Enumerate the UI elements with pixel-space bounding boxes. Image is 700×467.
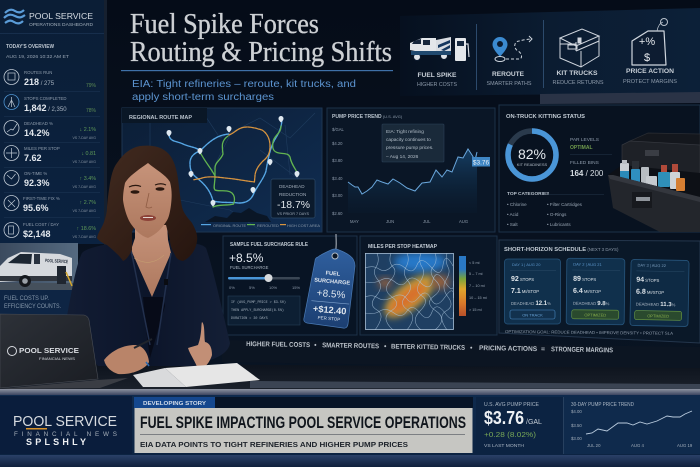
logo: pool service financial news: SPLSHLY bbox=[26, 437, 86, 447]
metric: first-time fix: 95.6% bbox=[23, 203, 49, 213]
schedule card: day 1: DAY 1 | AUG 20 bbox=[512, 262, 541, 267]
ticker strip: HIGHER FUEL COSTS bbox=[246, 341, 311, 349]
schedule card: day 2 bbox=[566, 258, 625, 325]
callout: EIA note: EIA: Tight refining bbox=[386, 129, 424, 135]
icon group: reroute bbox=[492, 36, 532, 62]
label: reroute: SMARTER PATHS bbox=[486, 81, 532, 87]
panel: fuel costs caption: FUEL COSTS UP. bbox=[4, 296, 49, 302]
logo bbox=[4, 10, 25, 23]
label: kit trucks: KIT TRUCKS bbox=[556, 70, 598, 77]
paper notes bbox=[133, 363, 260, 387]
stats: par levels and filled bins bbox=[570, 137, 612, 178]
metric: on-time: ON-TIME % bbox=[24, 171, 47, 176]
subtitle: apply short-term surcharges bbox=[132, 92, 274, 103]
laptop logo: POOL SERVICE bbox=[19, 346, 79, 355]
header strip with icons bbox=[400, 8, 700, 104]
metric: on-time: VS 7-DAY AVG bbox=[72, 185, 96, 189]
metric: routes run bbox=[4, 70, 97, 89]
silver divider bbox=[0, 389, 700, 395]
heading: ON-TRUCK KITTING STATUS bbox=[506, 114, 585, 120]
heading: regional route map bbox=[122, 108, 207, 123]
metric: deadhead bbox=[4, 120, 96, 140]
metric: miles per stop: ↓ 0.81 bbox=[81, 151, 96, 157]
icon group: price tag: +% bbox=[639, 36, 655, 48]
x axis labels bbox=[350, 219, 468, 224]
y axis labels: $3.40 bbox=[332, 176, 343, 181]
rule code box: THEN APPLY_SURCHARGE(8.5%) bbox=[231, 308, 284, 313]
panel: pump price trend chart bbox=[327, 108, 495, 232]
stats: par levels and filled bins: FILLED BINS bbox=[570, 160, 599, 166]
label: fuel spike: HIGHER COSTS bbox=[417, 82, 458, 88]
schedule card: day 1 bbox=[504, 259, 560, 324]
headline box: FUEL SPIKE IMPACTING POOL SERVICE OPERATIONS bbox=[140, 414, 466, 432]
metric: miles per stop bbox=[4, 146, 96, 164]
logo: pool service financial news: FINANCIAL NEWS bbox=[14, 431, 117, 438]
heatmap legend: < 5 mi bbox=[469, 261, 480, 265]
eyes bbox=[129, 184, 166, 194]
callout: deadhead reduction: VS PRIOR 7 DAYS bbox=[277, 212, 310, 216]
news desk bbox=[0, 363, 700, 392]
price block: +0.28 (8.02%) bbox=[484, 432, 536, 439]
metric: deadhead: VS 7-DAY AVG bbox=[72, 136, 96, 140]
schedule card: day 1: DEADHEAD 12.1% bbox=[511, 301, 551, 307]
subtitle: EIA: Tight refineries – reroute, kit trucks, and bbox=[132, 79, 356, 90]
surcharge value: +8.5% bbox=[229, 251, 264, 265]
callout: deadhead reduction: -18.7% bbox=[277, 200, 310, 211]
title: Fuel Spike Forces bbox=[130, 8, 319, 40]
price tag: PER STOP bbox=[317, 315, 340, 322]
panel: fuel costs caption: EFFICIENCY COUNTS. bbox=[4, 304, 61, 310]
map legend: HIGH COST AREA bbox=[287, 223, 320, 228]
slider: 0% bbox=[229, 285, 235, 290]
ticker strip: SMARTER ROUTES bbox=[322, 342, 380, 350]
mini trend chart: $3.00 bbox=[571, 436, 582, 441]
mini trend chart: 30-DAY PUMP PRICE TREND bbox=[571, 402, 634, 408]
price block: VS LAST MONTH bbox=[484, 443, 525, 449]
y axis labels: $3.80 bbox=[332, 158, 343, 163]
routes bbox=[169, 117, 297, 207]
callout: EIA note: pressure pump prices. bbox=[386, 145, 433, 151]
icon group: kit truck box bbox=[560, 29, 599, 67]
metric: first-time fix: FIRST-TIME FIX % bbox=[23, 196, 60, 201]
ticker strip: BETTER KITTED TRUCKS bbox=[391, 343, 466, 352]
metric: on-time: 92.3% bbox=[24, 178, 50, 188]
map region lines bbox=[150, 108, 315, 230]
mini trend chart: $4.00 bbox=[571, 409, 582, 414]
metric: stops completed: 1,842 / 2,350 bbox=[24, 103, 67, 113]
surcharge value bbox=[229, 251, 269, 270]
panel: miles per stop heatmap bbox=[360, 236, 497, 335]
ticker strip: PRICING ACTIONS bbox=[479, 345, 538, 353]
image: kit bin with bottles bbox=[608, 133, 700, 232]
top categories list: • Salt bbox=[507, 222, 518, 227]
stats: par levels and filled bins: OPTIMAL bbox=[570, 145, 592, 151]
price flag: $3.76 bbox=[473, 160, 490, 166]
mini trend chart: AUG 19 bbox=[677, 443, 693, 448]
schedule card: day 3: 94 STOPS bbox=[636, 277, 660, 284]
schedule card: day 2: 89 STOPS bbox=[573, 276, 596, 283]
price block: /GAL bbox=[526, 419, 542, 426]
donut: 82% kit readiness bbox=[508, 131, 556, 179]
y axis labels: $2.60 bbox=[332, 211, 343, 216]
surcharge value: FUEL SURCHARGE bbox=[230, 265, 269, 270]
face bbox=[123, 163, 172, 238]
price block: U.S. AVG PUMP PRICE bbox=[484, 402, 539, 408]
schedule card: day 1: 7.1 MI/STOP bbox=[511, 288, 539, 295]
schedule card: day 3: 6.8 MI/STOP bbox=[636, 289, 664, 296]
hair bbox=[97, 146, 197, 261]
callout: EIA note: – Aug 14, 2026 bbox=[386, 154, 419, 160]
panel: regional route map bbox=[122, 108, 322, 232]
y axis labels: $4.20 bbox=[332, 141, 343, 146]
label: price action bbox=[623, 68, 678, 85]
headline box bbox=[134, 408, 472, 453]
headline box: EIA DATA POINTS TO TIGHT REFINERIES AND HIGHER PUMP PRICES bbox=[140, 440, 408, 449]
jacket bbox=[67, 240, 230, 366]
x axis labels: AUG bbox=[459, 219, 468, 224]
donut: 82% kit readiness: 82% bbox=[518, 146, 546, 162]
stats: par levels and filled bins: PAR LEVELS bbox=[570, 137, 599, 143]
map legend: ORIGINAL ROUTE bbox=[213, 223, 247, 228]
laptop bbox=[0, 314, 128, 389]
tag: developing story bbox=[134, 397, 215, 408]
photo: pool service van: POOL SERVICE bbox=[45, 258, 69, 265]
mini trend chart: $3.50 bbox=[571, 423, 582, 428]
line chart bbox=[348, 149, 477, 213]
price tag: FUEL bbox=[325, 271, 341, 278]
callout: EIA note bbox=[382, 124, 444, 162]
subtitle bbox=[132, 79, 356, 103]
schedule card: day 3: DEADHEAD 11.3% bbox=[636, 302, 676, 308]
panel: short-horizon schedule bbox=[499, 240, 700, 343]
chart title: PUMP PRICE TREND (U.S. AVG) bbox=[332, 114, 403, 120]
metric: deadhead: 14.2% bbox=[24, 128, 50, 138]
heatmap legend bbox=[459, 256, 487, 316]
schedule card: day 1: 92 STOPS bbox=[511, 276, 534, 283]
top categories list: • Acid bbox=[507, 212, 519, 217]
lapel lines bbox=[131, 250, 171, 345]
right hand gesturing bbox=[188, 322, 212, 370]
price tag bbox=[304, 234, 355, 328]
y axis labels: $3.00 bbox=[332, 193, 343, 198]
lower third bbox=[0, 395, 700, 455]
panel: on-truck kitting status bbox=[499, 105, 700, 232]
metric: on-time bbox=[4, 170, 96, 189]
metric: fuel cost per day: VS 7-DAY AVG bbox=[72, 235, 96, 239]
x axis labels: JUN bbox=[386, 219, 394, 224]
left hand with pen bbox=[104, 345, 149, 374]
schedule card: day 3 bbox=[630, 259, 689, 326]
top categories list: • Chlorine bbox=[507, 202, 527, 207]
neck and chest bbox=[131, 225, 171, 297]
slider: 5% bbox=[249, 285, 255, 290]
brand text: OPERATIONS DASHBOARD bbox=[29, 22, 94, 27]
laptop logo bbox=[8, 346, 79, 361]
price tag: +8.5% bbox=[316, 288, 346, 301]
metric: miles per stop: 7.62 bbox=[24, 153, 42, 163]
title bbox=[130, 8, 392, 68]
ticker strip: STRONGER MARGINS bbox=[551, 346, 613, 354]
top categories list: • Lubricants bbox=[547, 222, 571, 227]
mini trend chart: AUG 4 bbox=[631, 443, 645, 448]
price tag: +$12.40 bbox=[313, 304, 347, 316]
icon group: fuel spike bbox=[410, 37, 469, 61]
label: reroute: REROUTE bbox=[492, 71, 524, 78]
rule code box: IF (AVG_PUMP_PRICE > $3.50) bbox=[231, 300, 286, 305]
metric: miles per stop: VS 7-DAY AVG bbox=[72, 160, 96, 164]
metric: on-time: ↑ 3.4% bbox=[80, 176, 96, 182]
price block: $3.76 bbox=[484, 408, 524, 428]
metric: fuel cost per day bbox=[4, 222, 96, 239]
slider bbox=[228, 274, 300, 290]
label: reroute bbox=[486, 71, 532, 87]
logo: pool service financial news: POOL SERVICE bbox=[13, 414, 117, 430]
schedule card: day 2: 6.4 MI/STOP bbox=[573, 288, 601, 295]
price block bbox=[476, 397, 563, 454]
heading: MILES PER STOP HEATMAP bbox=[368, 244, 438, 250]
metric: stops completed bbox=[4, 94, 97, 114]
metric: routes run: ROUTES RUN bbox=[24, 70, 52, 75]
heat map bbox=[365, 252, 454, 330]
heatmap legend: > 15 mi bbox=[469, 308, 482, 312]
rule code box: DURATION = 30 DAYS bbox=[231, 317, 268, 321]
price flag bbox=[472, 157, 490, 166]
label: kit trucks: REDUCE RETURNS bbox=[552, 80, 604, 86]
necklace bbox=[134, 255, 164, 262]
heatmap legend: 10 – 15 mi bbox=[469, 296, 487, 300]
stats: par levels and filled bins: 164 / 200 bbox=[570, 169, 604, 178]
x axis labels: JUL bbox=[423, 219, 431, 224]
map legend bbox=[201, 223, 320, 228]
heading: SHORT-HORIZON SCHEDULE (NEXT 3 DAYS) bbox=[504, 247, 619, 253]
today's overview heading: AUG 19, 2026 10:32 AM ET bbox=[6, 54, 69, 60]
top categories list: • O-Rings bbox=[547, 212, 567, 217]
metric: miles per stop: MILES PER STOP bbox=[24, 146, 60, 151]
inner top bbox=[143, 297, 165, 358]
callout: EIA note: capacity continues to bbox=[386, 137, 431, 143]
top categories list bbox=[507, 191, 604, 227]
heading: regional route map: REGIONAL ROUTE MAP bbox=[129, 115, 192, 121]
brand text: POOL SERVICE bbox=[29, 11, 93, 21]
schedule card: day 2: DAY 2 | AUG 21 bbox=[573, 262, 603, 267]
mini trend chart: JUL 20 bbox=[587, 443, 601, 448]
today's overview heading: TODAY'S OVERVIEW bbox=[6, 44, 55, 50]
metric: fuel cost per day: ↑ 18.6% bbox=[77, 226, 96, 232]
metric: stops completed: STOPS COMPLETED bbox=[24, 96, 66, 101]
panel: sample fuel surcharge rule bbox=[223, 234, 357, 335]
clip microphone bbox=[164, 279, 168, 285]
mini trend chart bbox=[564, 397, 700, 454]
top categories list: TOP CATEGORIES bbox=[507, 191, 550, 197]
label: price action: PROTECT MARGINS bbox=[623, 79, 678, 85]
schedule card: day 2: OPTIMIZED bbox=[584, 312, 606, 318]
title: Routing & Pricing Shifts bbox=[130, 36, 392, 68]
metric: stops completed: 78% bbox=[86, 108, 97, 114]
map legend: REROUTED bbox=[257, 223, 279, 228]
label: fuel spike: FUEL SPIKE bbox=[418, 72, 456, 79]
callout: deadhead reduction: DEADHEAD bbox=[279, 184, 305, 189]
schedule card: day 3: OPTIMIZED bbox=[647, 313, 669, 319]
donut: 82% kit readiness: KIT READINESS bbox=[517, 162, 548, 167]
ticker strip: = bbox=[541, 346, 545, 353]
top categories list: • Filter Cartridges bbox=[547, 202, 583, 207]
metric: routes run: 79% bbox=[86, 83, 97, 89]
price tag: SURCHARGE bbox=[314, 278, 351, 287]
heatmap legend: 7 – 10 mi bbox=[469, 284, 485, 288]
metric: first-time fix: VS 7-DAY AVG bbox=[72, 209, 96, 213]
rule code box bbox=[228, 296, 300, 325]
today's overview heading bbox=[6, 44, 69, 60]
callout: deadhead reduction: REDUCTION bbox=[279, 192, 306, 197]
metric: first-time fix bbox=[4, 196, 96, 213]
bottom band bbox=[0, 455, 700, 467]
y axis labels: $/GAL bbox=[332, 127, 345, 132]
ticker strip bbox=[222, 340, 700, 370]
ticker strip: • bbox=[314, 342, 317, 349]
route pins bbox=[166, 116, 300, 206]
optimization goal note: OPTIMIZATION GOAL: REDUCE DEADHEAD • IMPROVE DENSITY • PROTECT SLA bbox=[505, 329, 673, 336]
heading: SAMPLE FUEL SURCHARGE RULE bbox=[230, 242, 308, 248]
slider: 10% bbox=[269, 285, 277, 290]
schedule card: day 2: DEADHEAD 9.8% bbox=[573, 301, 610, 307]
heatmap legend: 5 – 7 mi bbox=[469, 272, 483, 276]
metric: first-time fix: ↑ 2.7% bbox=[80, 200, 96, 206]
label: kit trucks bbox=[552, 70, 604, 86]
anchor presenter bbox=[67, 146, 230, 374]
laptop logo: FINANCIAL NEWS bbox=[39, 356, 75, 361]
nose and mouth bbox=[140, 193, 156, 221]
ticker strip: • bbox=[384, 343, 387, 350]
panel: left operations dashboard bbox=[0, 0, 107, 300]
slider: 15% bbox=[292, 285, 300, 290]
logo: pool service financial news bbox=[0, 396, 132, 454]
tag: developing story: DEVELOPING STORY bbox=[143, 401, 206, 407]
label: price action: PRICE ACTION bbox=[626, 68, 674, 75]
label: fuel spike bbox=[417, 72, 458, 88]
schedule card: day 3: DAY 3 | AUG 22 bbox=[637, 263, 667, 268]
photo: pool service van bbox=[0, 243, 78, 290]
y axis labels bbox=[332, 127, 345, 216]
icon group: price tag bbox=[632, 18, 668, 65]
metric: deadhead: ↓ 2.1% bbox=[80, 127, 96, 133]
metric: fuel cost per day: FUEL COST / DAY bbox=[23, 222, 59, 227]
brand text bbox=[29, 11, 94, 27]
icon group: price tag: $ bbox=[644, 52, 650, 64]
metric: deadhead: DEADHEAD % bbox=[24, 121, 53, 126]
metric: routes run: 218 / 275 bbox=[24, 77, 55, 87]
panel: fuel costs caption bbox=[0, 290, 72, 315]
schedule card: day 1: ON TRACK bbox=[522, 312, 543, 318]
x axis labels: MAY bbox=[350, 219, 359, 224]
callout: deadhead reduction bbox=[271, 179, 315, 218]
metric: fuel cost per day: $2,148 bbox=[23, 229, 51, 239]
ticker strip: • bbox=[470, 345, 473, 352]
map dark silhouette bbox=[205, 208, 271, 222]
